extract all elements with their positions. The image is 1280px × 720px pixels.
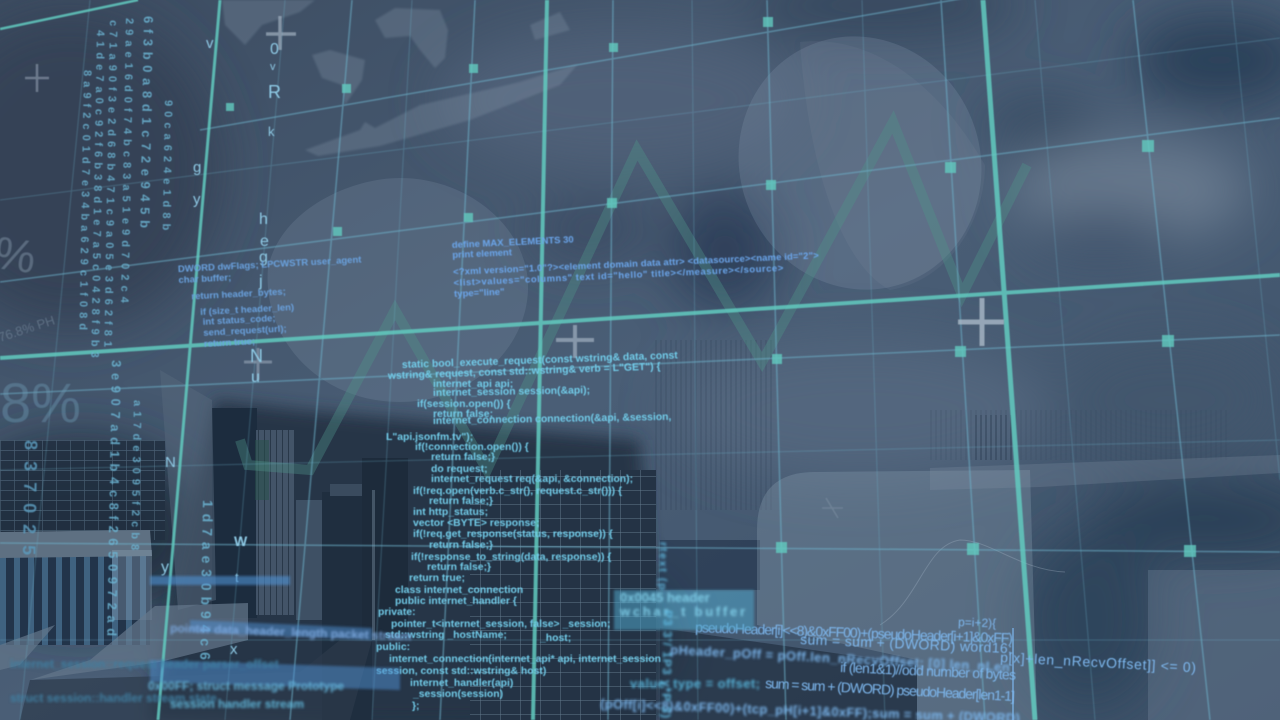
vertical letters: x <box>230 641 238 658</box>
vertical data columns: 6 f 3 b 0 a 8 d 1 c 7 2 e 9 4 5 b <box>137 16 156 229</box>
code block: left small <box>178 254 367 351</box>
vertical letters: j <box>258 273 263 290</box>
vertical data columns: 2 9 a e 1 6 d 0 f 7 4 b c 8 3 a 5 1 e 9 d 7 0 2 c 4 <box>118 18 135 304</box>
code block: left small: int status_code; <box>202 313 276 328</box>
vertical letters: u <box>251 369 260 386</box>
code block: bottom right smeared: 0x0045 header <box>620 590 710 605</box>
vertical data columns: 8 3 7 0 2 5 <box>19 440 41 558</box>
vertical data columns: a 1 7 d e 3 0 9 5 f 2 c b 8 <box>128 400 143 551</box>
vertical letters: g <box>259 249 268 266</box>
vertical data columns: c 7 1 a 9 0 f 3 e 2 d 6 8 b 4 7 1 c 9 a 0 5 e 3 d 6 2 f 8 1 <box>101 20 119 348</box>
percent signs and label: 8% <box>0 371 81 434</box>
code block: centre internet request: std::wstring _hostName; <box>385 630 507 641</box>
translucent band right <box>930 455 1280 490</box>
code block: centre internet request: internet_api api; <box>433 379 513 390</box>
vertical letters: e <box>260 233 269 250</box>
vertical letters: g <box>193 159 201 176</box>
thin curve on panel <box>880 540 1065 625</box>
vertical letters: y <box>193 191 201 208</box>
vertical letters: t <box>235 570 239 585</box>
vertical letters: R <box>268 82 281 102</box>
code block: centre internet request: if(!req.get_response(status, response)) { <box>413 529 613 540</box>
code block: bottom left smeared: internet_session::request header parser_offset <box>10 657 279 671</box>
code block: bottom right checksum <box>695 615 1196 704</box>
code block: left small: DWORD dwFlags; LPCWSTR user_agent <box>178 254 363 275</box>
vertical letters: v <box>206 35 214 52</box>
code block: centre internet request: internet_request req(&api, &connection); <box>431 474 633 485</box>
translucent circle right <box>697 0 1023 330</box>
code block: bottom right checksum: sum = sum + (DWORD) pseudoHeader[len1-1] <box>765 675 1015 704</box>
code block: centre internet request: if(!response_to_string(data, response)) { <box>411 552 611 563</box>
world map overlay <box>222 0 578 156</box>
dark strip behind checksum code <box>660 628 917 720</box>
vertical data columns: 8 a 9 f 2 c 0 1 d 7 e 3 4 b a 6 2 9 c 1 f 0 8 d <box>76 70 93 331</box>
code block: bottom left smeared: pointer data_header_length packet stream <box>170 621 412 643</box>
code block: top centre: print element <box>452 247 513 261</box>
code block: centre internet request: vector <BYTE> response; <box>413 518 539 529</box>
code block: left small: if (size_t header_len) <box>200 302 294 318</box>
vertical letters: N <box>250 346 263 366</box>
code block: centre internet request: return true; <box>409 573 465 584</box>
code block: centre internet request: if(session.open()) { <box>417 399 511 410</box>
vertical data columns: 9 0 c a 6 2 4 e 1 d 8 b <box>160 100 174 231</box>
code block: bottom right smeared: value_type = offset; <box>630 676 760 691</box>
code block: centre internet request: return false; <box>433 409 493 420</box>
translucent circle left <box>268 178 528 402</box>
percent signs and label <box>0 226 81 434</box>
code block: left small: return header_bytes; <box>191 286 286 302</box>
vertical letters <box>161 35 281 658</box>
code block: bottom right smeared: wchar_t buffer <box>619 604 745 619</box>
code block: centre internet request: }; <box>412 701 420 712</box>
code block: centre internet request: private: <box>378 607 416 618</box>
vertical data columns: 4 1 d e 7 a 0 c 9 2 f 6 b 3 8 d 1 e 7 a 5 c 0 4 2 8 f 9 b 3 <box>88 30 106 359</box>
code block: bottom right checksum: if (len1&1)//odd number of bytes <box>840 659 1016 683</box>
code block: centre internet request: if(!connection.open()) { <box>415 442 529 453</box>
code block: centre internet request: _host; <box>539 633 571 644</box>
code block: bottom right smeared: pHeader_pOff = pOff.len_nRecvOffset; [0] len_nLen <box>670 642 1010 675</box>
green zigzag line chart <box>240 122 1027 470</box>
vertical data columns: 3 e 9 0 7 a d 1 b 4 c 8 f 2 6 5 0 9 7 2 a d <box>104 360 124 637</box>
code block: centre internet request: return false;} <box>427 562 491 573</box>
code block: bottom left smeared: session handler stream <box>170 697 304 711</box>
vertical letters: h <box>259 211 268 228</box>
code block: top centre: <?xml version="1.0"?><element domain data attr> <datasource><name id="2"> <box>453 250 819 278</box>
grid node markers <box>226 17 1196 557</box>
code block: centre internet request: class internet_connection <box>395 585 523 596</box>
code block: centre internet request: if(!req.open(verb.c_str(), request.c_str())) { <box>413 486 622 497</box>
code block: bottom right checksum: sum = sum + (DWORD) word16; <box>800 631 1012 656</box>
translucent square bottom right <box>1148 570 1280 720</box>
code block: centre internet request: wstring& request, const std::wstring& verb = L"GET") { <box>387 361 661 382</box>
code block: centre internet request: static bool_execute_request(const wstring& data, const <box>402 350 678 371</box>
vertical letters: 0 <box>270 41 279 58</box>
code block: bottom left smeared: 0x00FF; struct message Prototype <box>148 679 344 693</box>
code block: centre internet request: public internet_handler { <box>395 596 517 607</box>
code block: centre internet request: internet_connection connection(&api, &session, <box>433 412 672 427</box>
code block: centre internet request: return false;} <box>429 496 493 507</box>
code block: bottom left smeared: struct session::handler stream state <box>10 691 217 705</box>
code block: centre internet request: internet_connection(internet_api* api, internet_session <box>389 654 661 665</box>
code block: centre internet request: internet_handler(api) <box>410 678 513 689</box>
code block: centre internet request: pointer_t<internet_session, false> _session; <box>391 619 610 630</box>
code block: centre internet request <box>376 350 678 712</box>
code block: top centre: type="line" <box>454 287 505 300</box>
plus markers <box>25 16 1004 518</box>
translucent rounded panel bottom right <box>757 470 1037 720</box>
code block: top centre <box>452 223 820 300</box>
code block: centre internet request: session, const std::wstring& host) <box>376 666 546 677</box>
code block: bottom right checksum: p=i+2){ <box>958 615 996 630</box>
code block: centre internet request: return false;} <box>431 452 495 463</box>
code block: bottom right checksum: pseudoHeader[i]<<8)&0xFF00)+(pseudoHeader[i+1]&0xFF) <box>695 619 1013 646</box>
code block: left small: send_request(url); <box>203 324 287 339</box>
vertical data columns <box>19 16 216 661</box>
code block: top centre: define MAX_ELEMENTS 30 <box>452 234 574 251</box>
code block: centre internet request: internet_session session(&api); <box>433 385 590 399</box>
code block: centre internet request: _session(session) <box>412 689 503 700</box>
vertical letters: k <box>268 124 275 139</box>
code block: centre internet request: return false;} <box>429 540 493 551</box>
code block: left small: char buffer; <box>178 272 232 286</box>
code block: bottom right checksum: p[x]+len_nRecvOffset]] <= 0) <box>1000 649 1196 675</box>
code bracket at right <box>1012 628 1014 720</box>
code block: bottom right smeared: P3 3'/ 1P3 y*P 3) <box>659 610 675 719</box>
code block: bottom right smeared <box>600 542 1020 720</box>
vertical letters: y <box>161 559 169 576</box>
code block: bottom left smeared <box>10 576 412 711</box>
code block: centre internet request: int http_status; <box>413 507 488 518</box>
vertical letters: N <box>165 454 176 471</box>
code block: left small: return true; <box>204 336 255 350</box>
code block: bottom right smeared: rtext (p <box>656 542 669 591</box>
city skyline <box>0 340 1230 720</box>
code block: centre internet request: public: <box>376 642 410 653</box>
code block: top centre: <list>values="columns" text id="hello" title></measure></source> <box>453 263 784 289</box>
vertical letters: v <box>270 61 276 73</box>
vertical letters: W <box>234 533 248 549</box>
vertical data columns: 1 d 7 a e 3 0 b 9 4 c 6 <box>197 500 216 661</box>
code block: centre internet request: L"api.jsonfm.tv"); <box>386 432 473 443</box>
code block: centre internet request: do request; <box>431 464 488 475</box>
